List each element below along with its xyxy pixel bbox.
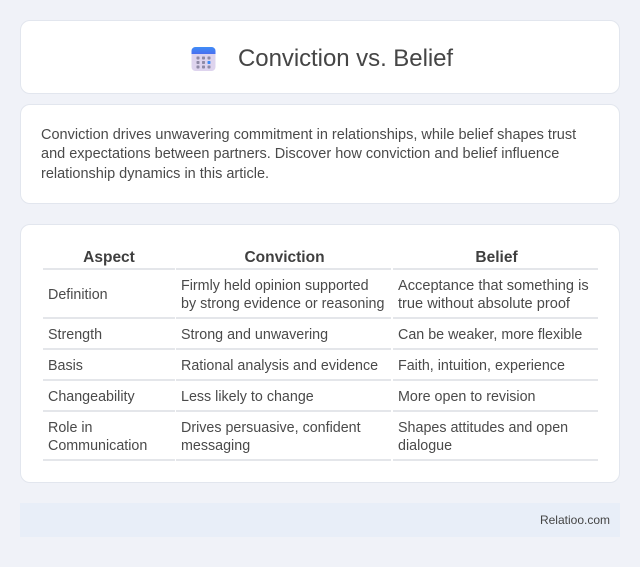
row: definition: Definition bbox=[48, 287, 108, 303]
row: changeability: More open to revision bbox=[398, 389, 535, 405]
row: strength bbox=[48, 327, 582, 343]
row: role in communication: Shapes attitudes and open bbox=[398, 420, 568, 436]
intro paragraph bbox=[41, 126, 576, 182]
row: changeability bbox=[48, 389, 535, 405]
row: role in communication: Drives persuasive, confident bbox=[181, 420, 361, 436]
row: changeability: Changeability bbox=[48, 389, 135, 405]
panel: intro text bbox=[20, 104, 620, 204]
intro paragraph: relationship dynamics in this article. bbox=[41, 166, 269, 182]
table header: Conviction bbox=[244, 249, 325, 266]
table header: Aspect bbox=[83, 249, 135, 266]
panel: comparison table bbox=[20, 224, 620, 483]
row: basis bbox=[48, 358, 565, 374]
row: role in communication: Role in bbox=[48, 420, 93, 436]
row: basis: Basis bbox=[48, 358, 83, 374]
title: Conviction vs. Belief bbox=[238, 45, 453, 72]
footer credit: Relatioo.com bbox=[540, 513, 610, 527]
row: strength: Strong and unwavering bbox=[181, 327, 328, 343]
row: strength: Strength bbox=[48, 327, 102, 343]
row: role in communication bbox=[48, 420, 568, 454]
intro paragraph: Conviction drives unwavering commitment in relationships, while belief shapes trust bbox=[41, 126, 576, 142]
table header bbox=[83, 249, 518, 266]
row: role in communication: messaging bbox=[181, 438, 250, 454]
row: changeability: Less likely to change bbox=[181, 389, 314, 405]
row: basis: Rational analysis and evidence bbox=[181, 358, 378, 374]
intro paragraph: and expectations between partners. Discover how conviction and belief influence bbox=[41, 146, 559, 162]
row: definition: true without absolute proof bbox=[398, 296, 570, 312]
row: strength: Can be weaker, more flexible bbox=[398, 327, 582, 343]
table header: Belief bbox=[475, 249, 518, 266]
row: basis: Faith, intuition, experience bbox=[398, 358, 565, 374]
row: role in communication: Communication bbox=[48, 438, 147, 454]
row: definition: by strong evidence or reasoning bbox=[181, 296, 384, 312]
footer bar bbox=[20, 503, 620, 537]
icon: calendar bbox=[192, 47, 216, 71]
row: definition: Firmly held opinion supported bbox=[181, 278, 369, 294]
row: definition: Acceptance that something is bbox=[398, 278, 589, 294]
panel: title card bbox=[20, 20, 620, 94]
row: definition bbox=[48, 278, 589, 312]
row: role in communication: dialogue bbox=[398, 438, 452, 454]
